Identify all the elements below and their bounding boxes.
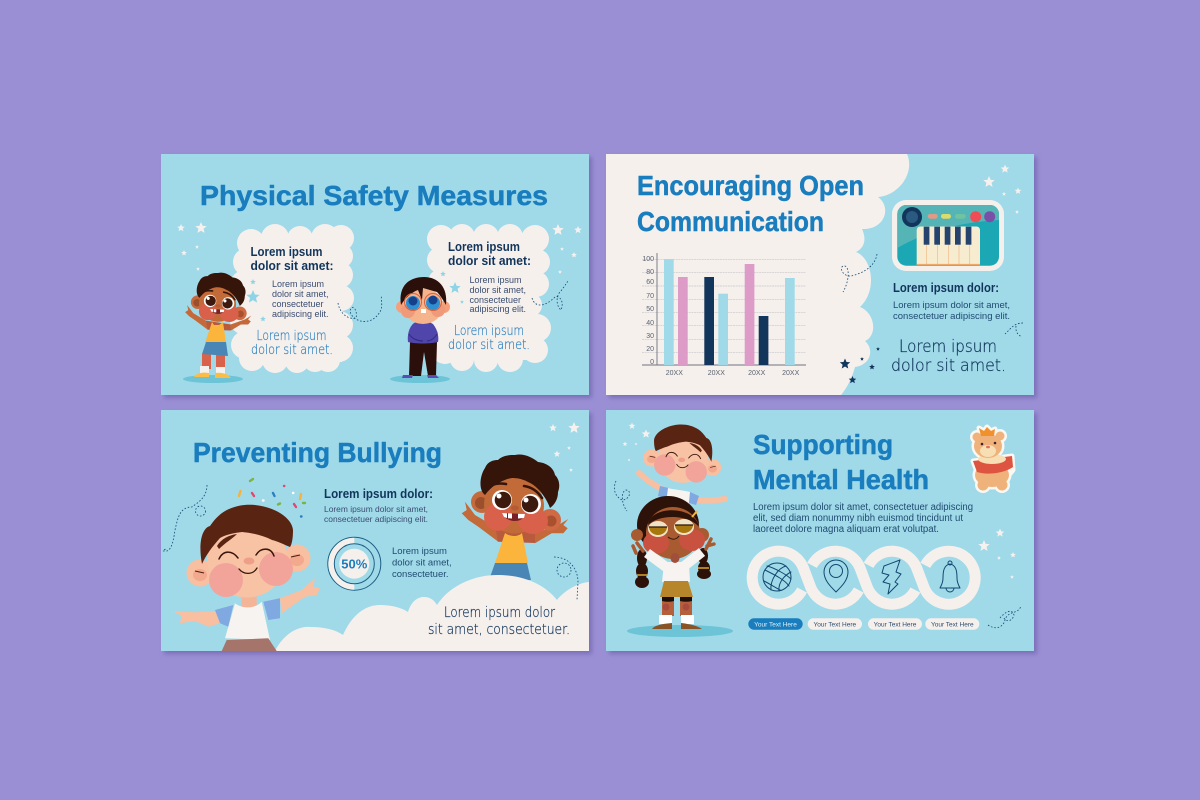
icon: lightning: [882, 560, 901, 594]
text left card: Lorem ipsum: [256, 329, 326, 344]
dashed doodles: [614, 481, 1021, 628]
character: curly boy: [183, 273, 251, 383]
character: boy in white shirt: [172, 505, 320, 651]
bar chart: 70: [646, 293, 654, 300]
wave ribbon: [752, 551, 975, 604]
text right card: Lorem ipsum: [448, 239, 520, 254]
title: communication: Encouraging Open: [637, 170, 864, 201]
bar chart: 20XX: [666, 370, 683, 377]
bar chart: 0: [650, 359, 654, 366]
cloud card left: [230, 224, 354, 373]
handwritten note: dolor sit amet.: [891, 356, 1006, 376]
cloud card right: [427, 224, 551, 372]
character: girl: [627, 496, 733, 637]
stars: [177, 222, 582, 274]
progress ring 50%: [328, 537, 381, 590]
text left card: Lorem ipsum: [250, 244, 322, 259]
text left card: dolor sit amet.: [251, 343, 333, 358]
panel: supporting mental health: [606, 410, 1034, 651]
bar chart: 20XX: [708, 370, 725, 377]
cream cloud: [275, 575, 589, 651]
label pills: [748, 618, 979, 630]
text block: Lorem ipsum dolor:: [324, 486, 433, 501]
text right card: dolor sit amet.: [448, 338, 530, 353]
text beside ring: dolor sit amet,: [392, 558, 452, 568]
panel: physical safety measures: [161, 154, 589, 395]
handwritten note: Lorem ipsum dolor: [444, 605, 555, 621]
title: mental health: Supporting: [753, 429, 893, 460]
bar chart: [642, 253, 806, 377]
icon: location pin: [824, 560, 848, 592]
text right card: Lorem ipsum: [470, 275, 522, 285]
handwritten note: Lorem ipsum: [899, 337, 997, 357]
title: mental health: Mental Health: [753, 464, 929, 495]
text block: Lorem ipsum dolor sit amet,: [324, 504, 428, 514]
icon: bell: [940, 561, 960, 592]
text beside ring: [392, 546, 452, 580]
bar chart: 30: [646, 333, 654, 340]
sticker: lion toy: [972, 427, 1013, 490]
text right card: Lorem ipsum: [454, 324, 524, 339]
body paragraph: [753, 502, 973, 535]
bar chart: 60: [646, 279, 654, 286]
text block: consectetuer adipiscing elit.: [324, 514, 428, 524]
text right card: dolor sit amet,: [470, 285, 526, 295]
confetti: [239, 479, 305, 516]
title: communication: [637, 170, 864, 237]
label pills: Your Text Here: [754, 621, 797, 628]
title: physical safety: Physical Safety Measures: [200, 180, 548, 211]
text left card: consectetuer: [272, 299, 324, 309]
label pills: Your Text Here: [931, 621, 974, 628]
panel: encouraging open communication: [606, 154, 1034, 395]
dashed doodles: [163, 485, 578, 600]
text left card: dolor sit amet:: [250, 258, 334, 273]
decorative stars on cards: [246, 271, 464, 321]
text right card: [448, 239, 531, 353]
text right card: consectetuer: [470, 295, 521, 305]
bar chart: 40: [646, 320, 654, 327]
icon: globe: [763, 563, 791, 591]
bar chart: 80: [646, 269, 654, 276]
cream cloud background: [606, 154, 909, 395]
body paragraph: laoreet dolore magna aliquam erat volutpat.: [753, 524, 939, 535]
text right card: adipiscing elit.: [470, 304, 526, 314]
text block right: consectetuer adipiscing elit.: [893, 311, 1010, 322]
handwritten note: [428, 605, 570, 638]
text beside ring: Lorem ipsum: [392, 546, 447, 557]
dashed doodles: [841, 254, 1023, 336]
body paragraph: elit, sed diam nonummy nibh euismod tincidunt ut: [753, 513, 963, 524]
handwritten note: [891, 337, 1006, 376]
bar chart: 20: [646, 346, 654, 353]
text left card: Lorem ipsum: [272, 279, 324, 289]
dashed doodles: [338, 280, 569, 321]
bar chart: 20XX: [748, 370, 766, 377]
title: bullying: Preventing Bullying: [193, 437, 442, 468]
stars: [840, 164, 1021, 383]
text block right: [893, 280, 1010, 322]
text block right: Lorem ipsum dolor sit amet,: [893, 300, 1010, 311]
text left card: [250, 244, 334, 358]
character: curly boy large: [462, 454, 568, 580]
bar chart: 100: [642, 256, 654, 263]
progress ring 50%: 50%: [341, 556, 368, 572]
bar chart: 50: [646, 306, 654, 313]
body paragraph: Lorem ipsum dolor sit amet, consectetuer adipiscing: [753, 502, 973, 513]
character: boy on shoulders: [639, 424, 725, 512]
text beside ring: consectetuer.: [392, 569, 449, 580]
title: mental health: [753, 429, 929, 495]
bar chart: 20XX: [782, 370, 800, 377]
stars: [623, 422, 1016, 579]
panel: preventing bullying: [161, 410, 589, 651]
illustration: toy piano: [892, 200, 1004, 271]
text left card: dolor sit amet,: [272, 289, 329, 299]
label pills: Your Text Here: [874, 621, 917, 628]
text block right: Lorem ipsum dolor:: [893, 280, 999, 295]
label pills: Your Text Here: [813, 621, 857, 628]
character: boy with glasses: [390, 277, 450, 383]
handwritten note: sit amet, consectetuer.: [428, 622, 570, 638]
text left card: adipiscing elit.: [272, 309, 329, 319]
stars: [549, 422, 580, 472]
text block: [324, 486, 433, 524]
text right card: dolor sit amet:: [448, 253, 531, 268]
title: communication: Communication: [637, 206, 824, 237]
